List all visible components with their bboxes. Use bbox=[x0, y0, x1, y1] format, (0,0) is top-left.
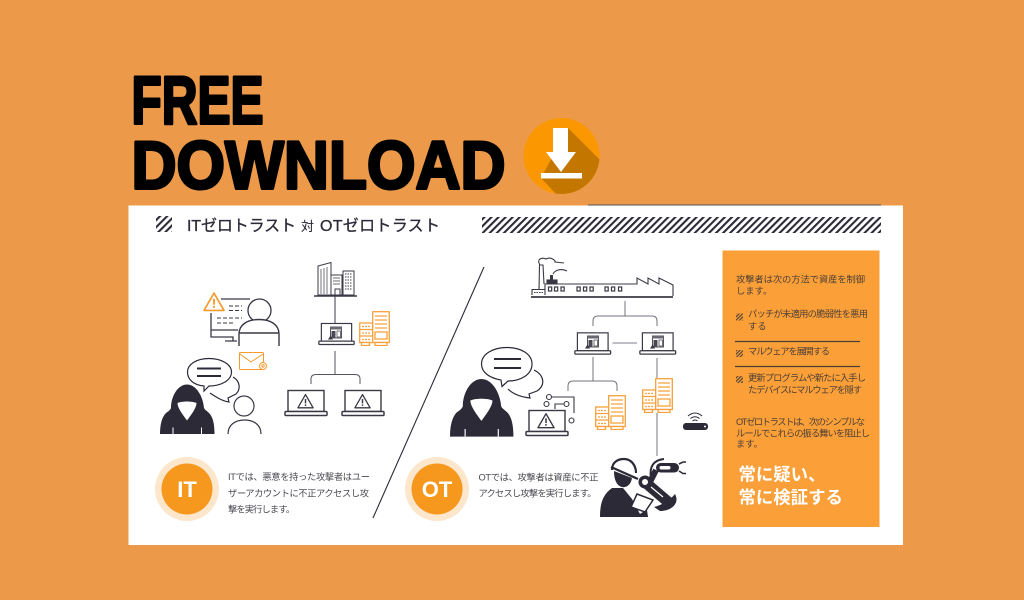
callout: always verify: 常に検証する bbox=[738, 488, 843, 508]
text block: OT zero trust bbox=[736, 416, 870, 449]
title: free download: DOWNLOAD bbox=[132, 128, 506, 204]
text block: attacker intro bbox=[736, 274, 865, 296]
connector: left laptop to devices bbox=[568, 357, 617, 391]
heading bbox=[187, 217, 440, 235]
text block: IT description bbox=[228, 471, 370, 514]
text block: OT zero trust: OTゼロトラストは、次のシンプルな bbox=[736, 416, 865, 427]
text block: OT zero trust: ます。 bbox=[736, 439, 763, 449]
connector: factory to OT laptops bbox=[593, 301, 657, 326]
icon: speech bubble OT bbox=[482, 348, 543, 398]
panel: attacker methods bbox=[722, 250, 880, 527]
text block: OT description: OTでは、攻撃者は資産に不正 bbox=[478, 472, 598, 482]
icon: OT orange servers upper bbox=[643, 379, 672, 412]
icon: IT laptop with app bbox=[319, 323, 354, 345]
icon: OT orange servers lower bbox=[596, 396, 625, 430]
heading hatch bar bbox=[482, 217, 881, 233]
icon: hooded attacker bbox=[160, 384, 214, 434]
list item: hide malware: たデバイスにマルウェアを隠す bbox=[748, 384, 862, 395]
badge: IT: IT bbox=[177, 477, 197, 502]
icon: speech bubble bbox=[188, 358, 239, 402]
badge: OT: OT bbox=[422, 477, 453, 502]
text block: IT description: 撃を実行します。 bbox=[228, 504, 295, 514]
panel: infographic card bbox=[128, 204, 903, 545]
text block: attacker intro: 攻撃者は次の方法で資産を制御 bbox=[736, 274, 865, 284]
list item: exploit vulnerabilities: パッチが未適用の脆弱性を悪用 bbox=[748, 308, 868, 319]
list item: exploit vulnerabilities bbox=[736, 308, 868, 332]
list item: hide malware bbox=[736, 372, 866, 395]
list item: hide malware: 更新プログラムや新たに入手し bbox=[748, 372, 866, 383]
icon: heading hatch square bbox=[156, 216, 172, 232]
title: free download: FREE bbox=[132, 62, 264, 138]
text block: OT description bbox=[478, 472, 598, 498]
list item: deploy malware: マルウェアを展開する bbox=[748, 346, 830, 356]
connector: building to server laptop bbox=[334, 296, 336, 323]
icon: city buildings bbox=[314, 262, 357, 296]
icon: user victim bbox=[228, 396, 261, 434]
heading: ITゼロトラスト bbox=[187, 217, 296, 235]
badge: OT bbox=[405, 457, 469, 521]
icon: download button bbox=[524, 118, 600, 194]
text block: IT description: ITでは、悪意を持った攻撃者はユー bbox=[228, 471, 370, 482]
text block: OT description: アクセスし攻撃を実行します。 bbox=[478, 488, 596, 498]
icon: compromised laptop with circuit bbox=[526, 394, 574, 436]
icon: OT laptop left bbox=[575, 333, 611, 354]
connector: right laptop to worker bbox=[656, 358, 658, 456]
text block: OT zero trust: ルールでこれらの振る舞いを阻止し bbox=[736, 428, 870, 438]
icon: IT orange servers bbox=[360, 312, 389, 346]
icon: factory bbox=[531, 258, 673, 297]
icon: OT laptop right bbox=[640, 333, 676, 354]
title: free download bbox=[132, 62, 506, 204]
icon: warning laptop right bbox=[342, 390, 384, 416]
list separators bbox=[735, 342, 860, 366]
text block: IT description: ザーアカウントに不正アクセスし攻 bbox=[228, 488, 369, 498]
icon: worker with robot arm bbox=[600, 459, 686, 517]
icon: orange warning triangle bbox=[204, 293, 224, 310]
heading: 対 bbox=[301, 219, 314, 234]
heading: OTゼロトラスト bbox=[320, 217, 440, 235]
diagonal divider bbox=[373, 267, 484, 518]
icon: attacker at monitor bbox=[211, 299, 279, 346]
list item: exploit vulnerabilities: する bbox=[748, 322, 767, 332]
callout: always verify bbox=[738, 464, 843, 508]
callout: always verify: 常に疑い、 bbox=[738, 464, 825, 484]
text block: attacker intro: します。 bbox=[736, 286, 772, 296]
badge: IT bbox=[155, 457, 219, 521]
icon: wifi router bbox=[683, 413, 708, 430]
connector: laptop link bbox=[612, 342, 637, 344]
icon: email envelope bbox=[240, 352, 266, 370]
connector: bracket to endpoints bbox=[311, 351, 360, 384]
icon: warning laptop left bbox=[285, 390, 327, 416]
icon: hooded attacker OT bbox=[450, 379, 513, 437]
